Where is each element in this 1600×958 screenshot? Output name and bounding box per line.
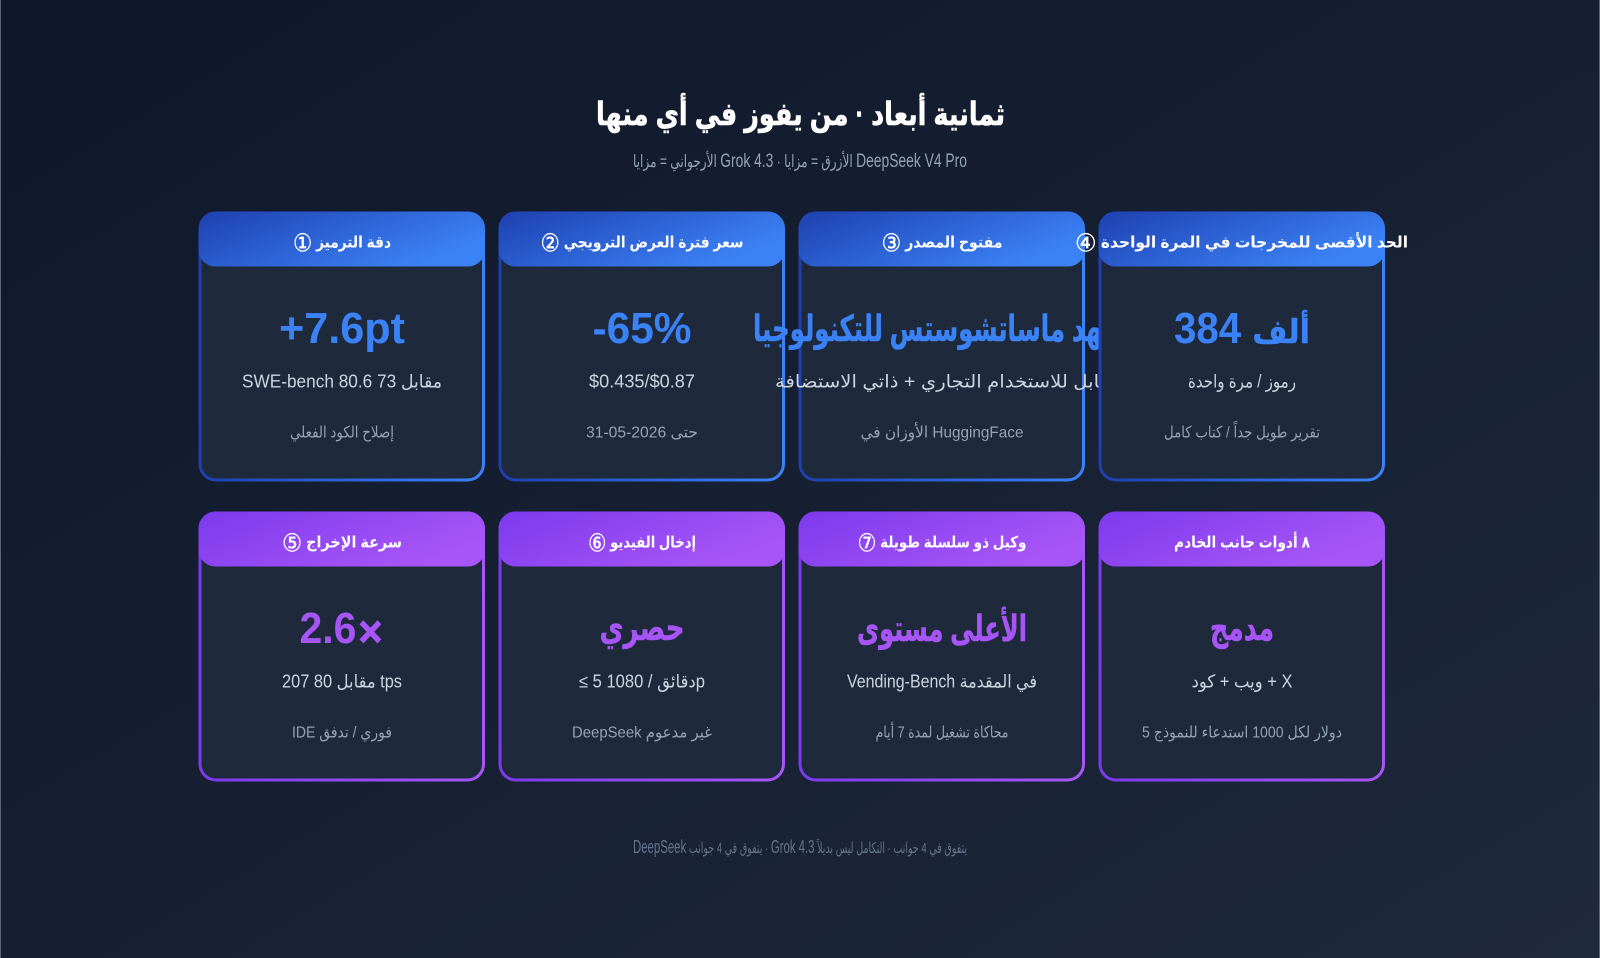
panel: card 7 long-chain agent: Vending-Bench في المقدمة bbox=[847, 672, 1037, 692]
panel: card 7 long-chain agent: ⑦ وكيل ذو سلسلة طويلة bbox=[858, 529, 1026, 557]
panel: card 1 coding accuracy: ① دقة الترميز bbox=[293, 229, 391, 257]
panel: card 8 server-side tools: 5 دولار لكل 1000 استدعاء للنموذج bbox=[1142, 724, 1342, 742]
panel: card 3 open source: معهد ماساتشوستس للتكنولوجيا bbox=[753, 308, 1131, 350]
panel: card 8 server-side tools bbox=[1098, 512, 1385, 780]
panel: card 2 promo price: -65% bbox=[592, 304, 692, 353]
subtitle: DeepSeek V4 Pro الأزرق = مزايا · Grok 4.3 الأرجواني = مزايا bbox=[633, 150, 967, 172]
panel: card 7 long-chain agent: الأعلى مستوى bbox=[857, 606, 1027, 650]
panel: card 2 promo price bbox=[498, 212, 785, 480]
panel: card 8 server-side tools: ٨ أدوات جانب الخادم bbox=[1174, 532, 1310, 552]
panel: card 3 open source bbox=[753, 212, 1131, 480]
panel: card 5 output speed: ⑤ سرعة الإخراج bbox=[282, 529, 402, 557]
panel: card 8 server-side tools: ويب + كود + X bbox=[1192, 672, 1292, 692]
panel: card 4 max output: ④ الحد الأقصى للمخرجات في المرة الواحدة bbox=[1075, 229, 1408, 257]
panel: card 3 open source: ③ مفتوح المصدر bbox=[882, 229, 1002, 257]
panel: card 7 long-chain agent: محاكاة تشغيل لمدة 7 أيام bbox=[875, 722, 1008, 742]
panel: card 8 server-side tools: مدمج bbox=[1210, 607, 1274, 649]
panel: card 4 max output bbox=[1075, 212, 1408, 480]
panel: card 1 coding accuracy bbox=[198, 212, 485, 480]
panel: card 5 output speed bbox=[198, 512, 485, 780]
title: ثمانية أبعاد · من يفوز في أي منها bbox=[596, 93, 1005, 133]
panel: card 6 video input: ≤ 5 دقائق / 1080p bbox=[579, 672, 705, 692]
panel: card 4 max output: تقرير طويل جداً / كتاب كامل bbox=[1164, 420, 1320, 442]
panel: card 4 max output: رموز / مرة واحدة bbox=[1188, 372, 1296, 392]
panel: card 5 output speed: 207 مقابل 80 tps bbox=[282, 672, 402, 692]
panel: card 2 promo price: ② سعر فترة العرض الترويجي bbox=[540, 229, 744, 257]
panel: card 6 video input: حصري bbox=[600, 607, 684, 649]
panel: card 3 open source: قابل للاستخدام التجاري + ذاتي الاستضافة bbox=[775, 372, 1109, 392]
panel: card 2 promo price: $0.435/$0.87 bbox=[589, 372, 695, 392]
panel: card 3 open source: الأوزان في HuggingFace bbox=[860, 422, 1024, 442]
footer note: يتفوق في 4 جوانب · التكامل ليس بديلاً Grok 4.3 · يتفوق في 4 جوانب DeepSeek bbox=[633, 837, 967, 858]
panel: card 1 coding accuracy: +7.6pt bbox=[279, 304, 405, 353]
panel: card 7 long-chain agent bbox=[798, 512, 1085, 780]
panel: card 1 coding accuracy: إصلاح الكود الفعلي bbox=[290, 424, 394, 442]
panel: card 5 output speed: IDE فوري / تدفق bbox=[292, 724, 392, 742]
panel: card 5 output speed: 2.6× bbox=[300, 604, 384, 653]
panel: card 6 video input: ⑥ إدخال الفيديو bbox=[588, 529, 696, 557]
panel: card 2 promo price: حتى 2026-05-31 bbox=[586, 424, 698, 442]
panel: card 6 video input bbox=[498, 512, 785, 780]
panel: card 1 coding accuracy: SWE-bench 80.6 مقابل 73 bbox=[242, 372, 442, 392]
panel: card 6 video input: DeepSeek غير مدعوم bbox=[572, 724, 712, 742]
panel: card 4 max output: 384 ألف bbox=[1174, 304, 1310, 353]
